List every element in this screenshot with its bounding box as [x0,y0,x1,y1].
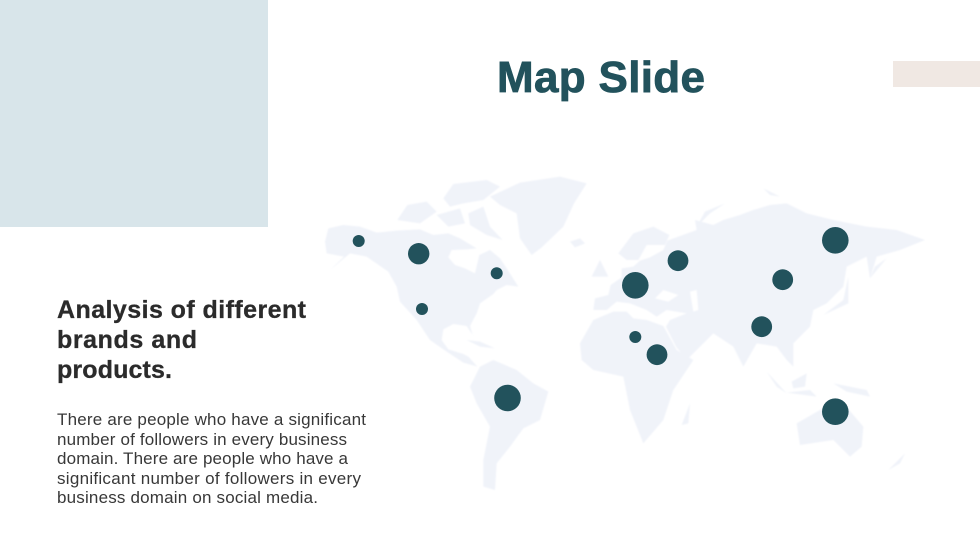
world map [325,177,925,490]
heading: brands and [57,326,197,354]
body text: business domain on social media. [57,488,318,507]
body text: There are people who have a significant [57,410,366,429]
decorative panel: beige bar [893,61,980,87]
heading: Analysis of different [57,296,307,324]
map: inland seas [655,290,698,312]
location markers [353,227,849,425]
title: Map Slide [497,53,705,102]
map: Europe, Asia, Africa, Oceania [580,188,925,470]
body text [57,410,366,507]
heading: products. [57,356,172,384]
body text: significant number of followers in every [57,469,362,488]
heading [57,296,307,384]
body text: domain. There are people who have a [57,449,349,468]
map: Americas and Greenland [325,177,587,490]
body text: number of followers in every business [57,430,347,449]
decorative panel: blue square [0,0,268,227]
